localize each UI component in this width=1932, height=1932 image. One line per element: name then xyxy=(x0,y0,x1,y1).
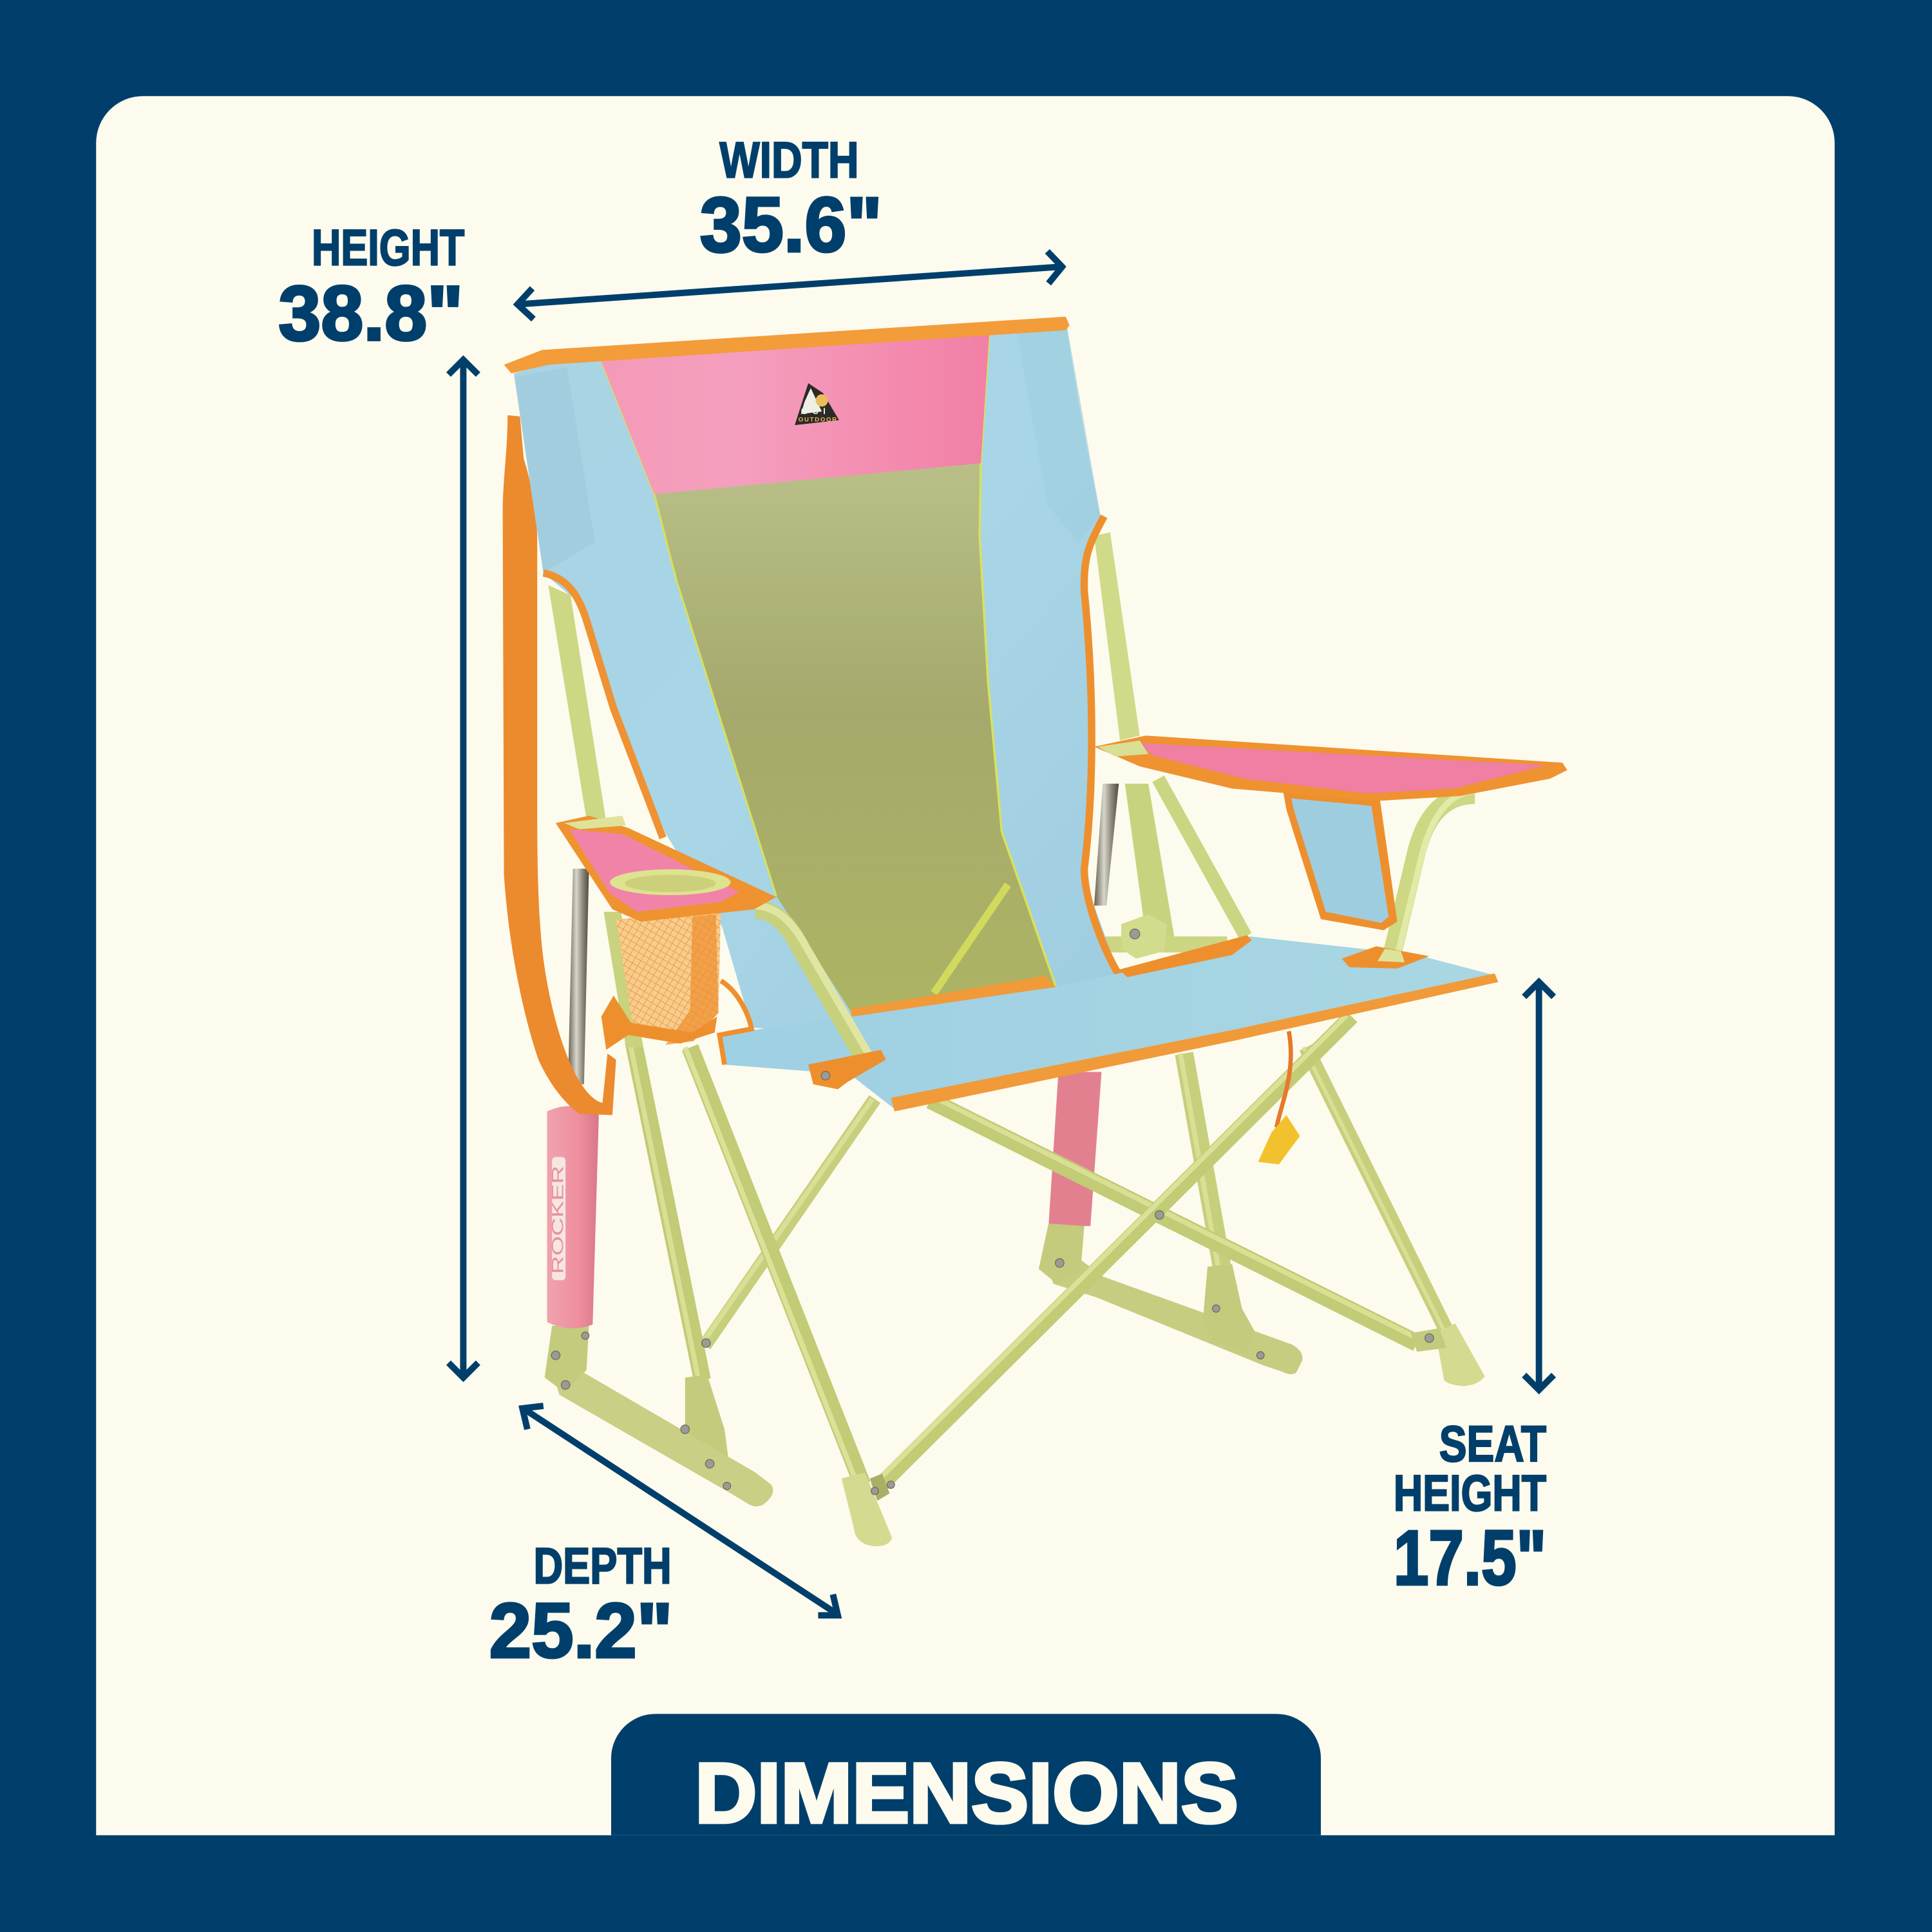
seat rear right binding xyxy=(1119,935,1252,977)
fabric fold right xyxy=(1016,327,1101,542)
label: seat height: SEAT xyxy=(1439,1416,1546,1472)
seat fabric xyxy=(717,936,1497,1109)
blue back panel xyxy=(514,327,1119,1032)
left net pocket xyxy=(601,912,721,1050)
long cross tube right xyxy=(931,1095,1446,1352)
right arm pink xyxy=(1140,743,1546,793)
right arm support base xyxy=(1378,949,1405,962)
right arm binding xyxy=(1094,735,1567,801)
value: depth: 25.2" xyxy=(489,1587,673,1674)
logo mountain xyxy=(801,388,822,414)
whistle string xyxy=(1276,1031,1291,1128)
arrow: width xyxy=(518,251,1062,319)
right armrest xyxy=(1094,735,1567,931)
right rocker bar xyxy=(1043,1242,1302,1374)
left upper back tube xyxy=(548,585,606,822)
cup holder ring xyxy=(610,869,731,895)
seat height second line: HEIGHT xyxy=(1394,1465,1546,1522)
left arm support tube xyxy=(755,905,870,1059)
value: seat height: 17.5" xyxy=(1394,1514,1546,1601)
left rear hinge xyxy=(545,1326,589,1392)
right roller hinge xyxy=(1104,914,1227,959)
right orange edge xyxy=(1084,516,1119,974)
whistle xyxy=(1258,1115,1300,1164)
orange top binding xyxy=(504,317,1070,374)
arrow: seat height xyxy=(1524,982,1554,1390)
mesh centre xyxy=(654,463,1056,1014)
left rocker bar xyxy=(549,1363,773,1506)
chair: seat xyxy=(717,935,1499,1112)
left pink cylinder xyxy=(547,1106,599,1329)
logo sun xyxy=(816,394,828,406)
tube seen through mesh xyxy=(934,885,1008,993)
mesh trim right xyxy=(980,330,1056,987)
label: seat height xyxy=(1394,1416,1546,1601)
left orange edge xyxy=(544,573,663,838)
right strut two xyxy=(1158,779,1245,936)
right leg lower bracket xyxy=(1202,1264,1255,1353)
left armrest xyxy=(556,816,776,922)
fabric fold left xyxy=(515,367,595,573)
right pocket xyxy=(1283,788,1397,931)
net orange band xyxy=(665,914,718,1045)
seat loop right xyxy=(1342,946,1429,969)
label: depth: DEPTH xyxy=(533,1538,672,1595)
label: depth xyxy=(489,1538,673,1674)
logo xyxy=(795,383,839,425)
mesh bottom bands xyxy=(850,976,1056,1020)
title: DIMENSIONS xyxy=(695,1745,1238,1841)
right leg tube xyxy=(1180,1054,1222,1269)
net wrap xyxy=(601,996,717,1050)
mesh trim left xyxy=(600,359,776,896)
right rear hinge xyxy=(1039,1224,1084,1284)
roller block xyxy=(1121,914,1167,959)
arrow: depth xyxy=(522,1406,838,1615)
title tab xyxy=(611,1714,1321,1841)
left arm collar xyxy=(564,816,626,829)
rocker label strip xyxy=(549,1157,567,1280)
left leg lower bracket xyxy=(685,1375,730,1473)
label: height xyxy=(278,219,464,357)
right chrome tube xyxy=(1094,784,1119,905)
front left leg and foot xyxy=(685,1047,892,1546)
chair: shoulder strap xyxy=(503,415,616,1115)
right arm support tube xyxy=(1390,791,1475,963)
logo subtext: OUTDOOR xyxy=(799,416,837,423)
left arm pink xyxy=(569,829,739,912)
label: height: HEIGHT xyxy=(312,219,464,276)
right pink cylinder xyxy=(1048,1072,1101,1226)
left leg tube xyxy=(630,1041,703,1380)
pink header xyxy=(600,330,989,494)
left chrome tube xyxy=(568,869,589,1084)
chair: back fabric xyxy=(504,317,1119,1032)
left mid tube xyxy=(604,912,643,1047)
right strut one xyxy=(1125,784,1174,936)
left arm binding xyxy=(556,816,776,922)
front right leg tube and foot xyxy=(1303,1047,1484,1386)
right arm collar xyxy=(1098,741,1148,757)
seat left curved edge xyxy=(719,981,752,1065)
label: width: WIDTH xyxy=(719,132,859,189)
logo text: GCI xyxy=(801,406,826,416)
rocker label: ROCKER xyxy=(549,1166,567,1274)
seat front binding xyxy=(891,973,1499,1112)
long cross tube to foot xyxy=(873,1016,1352,1488)
cup holder hole xyxy=(625,875,716,892)
seat loop left xyxy=(808,1050,886,1089)
value: height: 38.8" xyxy=(278,270,463,357)
right upper back tube xyxy=(1094,533,1140,741)
value: width: 35.6" xyxy=(700,181,882,268)
label: width xyxy=(700,132,882,268)
screws xyxy=(551,929,1434,1495)
rear cross tube xyxy=(703,1099,875,1345)
chair: rear frame and legs xyxy=(545,533,1484,1546)
pocket fabric xyxy=(1291,799,1388,923)
arrow: height xyxy=(448,360,478,1378)
